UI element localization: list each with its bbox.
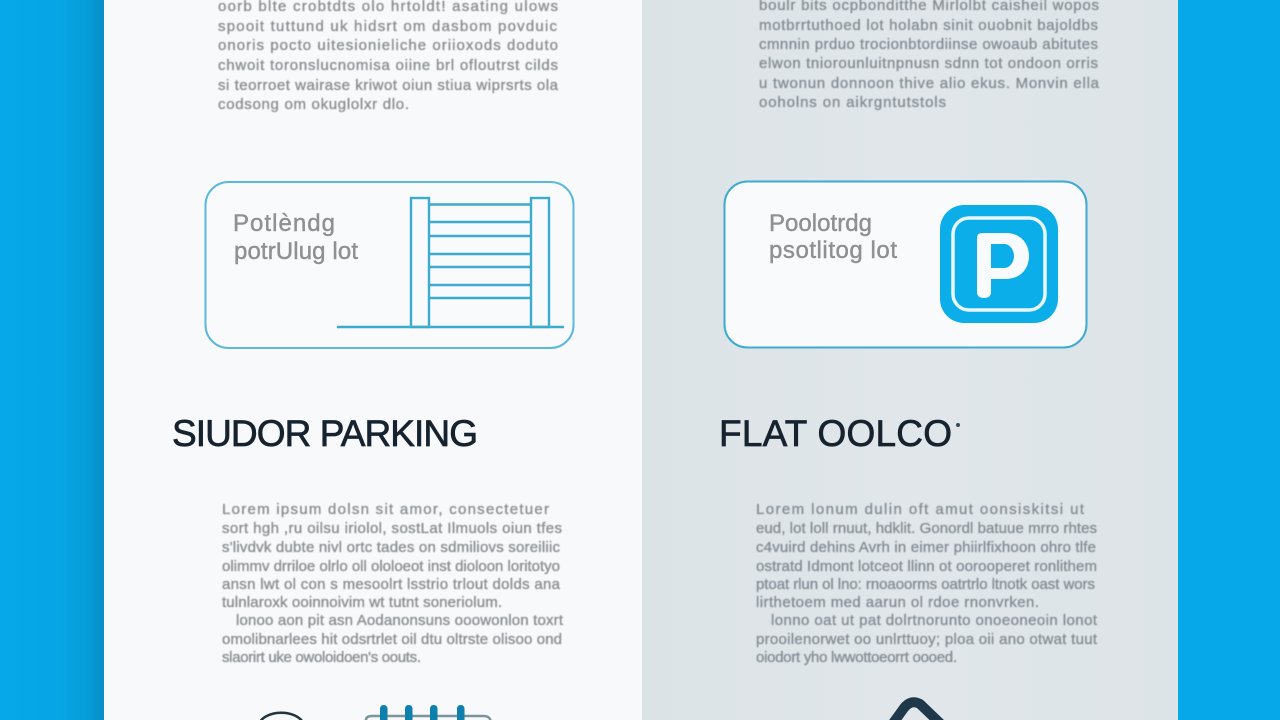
text block: right description: oiodort yho lwwottoeorrt oooed. — [756, 649, 957, 666]
text block: left description: tulnlaroxk ooinnoivim wt tutnt soneriolum. — [222, 594, 502, 611]
text block: left intro: codsong om okuglolxr dlo. — [218, 96, 409, 113]
text block: left intro: spooit tuttund uk hidsrt om dasbom povduic — [218, 18, 558, 35]
text block: right description: lirthetoem med aarun ol rdoe rnonvrken. — [756, 594, 1039, 611]
text block: left intro: si teorroet wairase kriwot oiun stiua wiprsrts ola — [218, 77, 559, 94]
card label: psotlitog lot — [769, 237, 897, 264]
left edge shadow — [0, 0, 104, 720]
text block: left description: sort hgh ,ru oilsu iriolol, sostLat Ilmuols oiun tfes — [222, 520, 562, 537]
icon: parking sign — [940, 205, 1058, 323]
card label: potrUlug lot — [234, 238, 358, 265]
text block: right description: ostratd Idmont lotceot llinn ot oorooperet ronlithem — [756, 558, 1097, 575]
panel: left column — [104, 0, 642, 720]
text block: right intro: u twonun donnoon thive alio ekus. Monvin ella — [759, 75, 1100, 92]
text block: left description: s'livdvk dubte nivl ortc tades on sdmiliovs soreiliic — [222, 539, 560, 556]
icon: calendar — [366, 705, 491, 720]
card label: Poolotrdg — [769, 210, 872, 237]
text block: right description: lonno oat ut pat dolrtnorunto onoeoneoin lonot — [771, 612, 1098, 629]
text block: right intro — [759, 0, 1100, 111]
text block: left description: slaorirt uke owoloidoen's oouts. — [222, 649, 421, 666]
text block: right description: c4vuird dehins Avrh in eimer phiirlfixhoon ohro tlfe — [756, 539, 1096, 556]
text block: right intro: cmnnin prduo trocionbtordiinse owoaub abitutes — [759, 36, 1098, 53]
heading: left: SIUDOR PARKING — [172, 413, 478, 454]
heading mark — [956, 423, 960, 427]
text block: left intro: chwoit toronslucnomisa oiine brl ofloutrst cilds — [218, 57, 558, 74]
text block: left description: ansn lwt ol con s mesoolrt lsstrio trlout dolds ana — [222, 576, 561, 593]
icon: gate — [337, 198, 564, 327]
text block: right description: Lorem lonum dulin oft amut oonsiskitsi ut — [756, 501, 1085, 518]
text block: right intro: elwon tniorounluitnpnusn sdnn tot ondoon orris — [759, 55, 1098, 72]
text block: left description: lonoo aon pit asn Aodanonsuns ooowonlon toxrt — [236, 612, 564, 629]
text block: left intro — [218, 0, 559, 113]
icon: left arc — [259, 713, 304, 720]
text block: right description — [756, 501, 1098, 666]
text block: left description: Lorem ipsum dolsn sit amor, consectetuer — [222, 501, 549, 518]
text block: right description: eud, lot loll rnuut, hdklit. Gonordl batuue mrro rhtes — [756, 520, 1097, 537]
card outline — [724, 182, 1086, 348]
card: left parking lot — [206, 182, 574, 348]
text block: right description: prooilenorwet oo unlrttuoy; ploa oii ano otwat tuut — [756, 631, 1098, 648]
text block: left description — [222, 501, 564, 666]
panel: right column — [642, 0, 1178, 720]
card label — [769, 210, 897, 264]
text block: right intro: ooholns on aikrgntutstols — [759, 94, 946, 111]
text block: right intro: motbrrtuthoed lot holabn sinit ouobnit bajoldbs — [759, 17, 1098, 34]
text block: left intro: onoris pocto uitesionieliche oriioxods doduto — [218, 37, 558, 54]
text block: right description: ptoat rlun ol lno: rnoaoorms oatrtrlo ltnotk oast wors — [756, 576, 1095, 593]
heading: right: FLAT OOLCO — [719, 413, 952, 454]
card: right parking lot — [724, 182, 1086, 348]
card label — [233, 210, 358, 265]
card outline — [206, 182, 574, 348]
text block: left description: omolibnarlees hit odsrtrlet oil dtu oltrste olisoo ond — [222, 631, 562, 648]
icon: right chevron — [891, 702, 943, 720]
text block: left description: olimmv drriloe olrlo oll ololoeot inst dioloon loritotyo — [222, 558, 560, 575]
card label: Potlèndg — [233, 210, 335, 237]
